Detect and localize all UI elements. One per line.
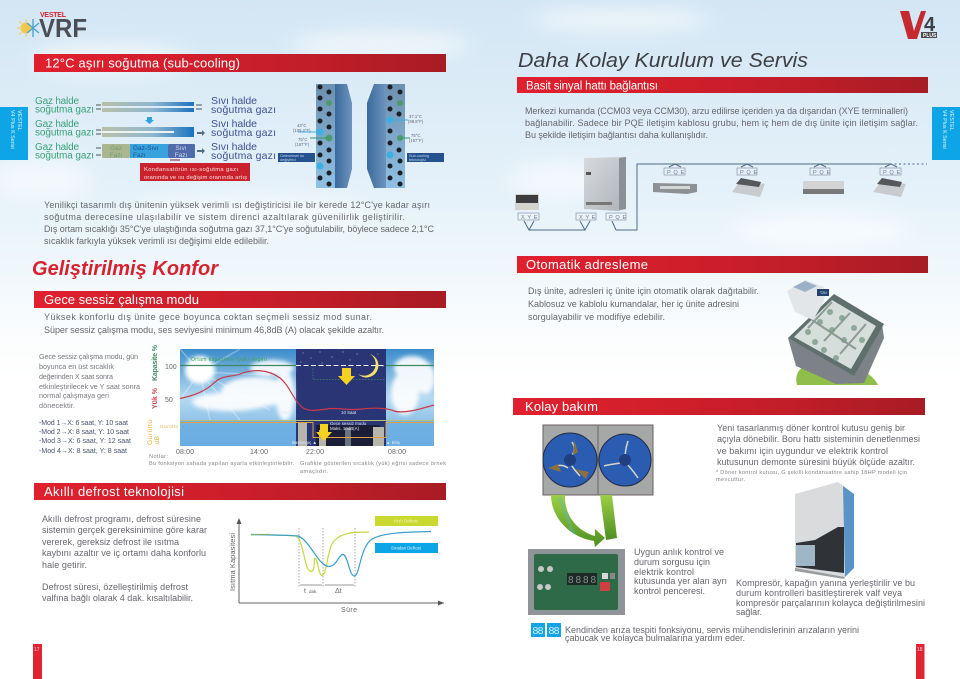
heading band: Otomatik adresleme: Otomatik adresleme [526,257,648,272]
text: signal description: bağlanabilir. Sadece bir PQE iletişim kablosu grubu, hem iç hem de dış ünite için iletişim sağlar. [525,118,918,128]
chart small labels: 10 Saat [341,410,357,415]
time arrows [300,584,354,586]
text: self diagnosis: Kendinden arıza tespiti fonksiyonu, servis mühendislerinin arızaların yerini [565,625,859,635]
logo: Vestel VRF [17,12,87,43]
liquid labels [211,95,276,162]
controller [515,194,539,210]
heading: Daha Kolay Kurulum: Daha Kolay Kurulum ve Servis [518,49,808,72]
logo: V4 Plus: PLUS [923,33,937,39]
chart axes labels: 08:00 [388,449,406,456]
liquid labels: Sıvı halde [211,118,257,130]
text: mode list: -Mod 4→X: 8 saat, Y: 8 saat [39,448,127,455]
icon: error display [531,623,561,637]
chart axes labels: dB [154,436,161,444]
side tab right [932,107,960,160]
gas labels: Gaz halde [35,142,79,153]
text: sub-cooling description: Dış ortam sıcaklığı 35°C'ye ulaştığında soğutma gazı 37,1°C'ye soğutulabilir, böylece sadece 2,1°C [44,224,434,234]
capacity line [180,357,434,380]
label: sub-cooling: Sub-cooling [409,154,429,158]
heading band: Gece sessiz [34,291,446,308]
text: sub-cooling description: Yenilikçi tasarımlı dış ünitenin yüksek verimli ısı değiştiricisi ile bir kerede 12°C'ye kadar aşırı [44,200,430,210]
heading band: sub-cooling: 12°C aşırı soğutma (sub-cooling) [45,56,240,70]
text: compressor: kompresör parçalarının kolayca değiştirilmesini [736,598,925,608]
wiring lines [524,164,927,230]
tubes: Fazı [110,152,123,159]
chart small labels: ▲ Bitiş [386,440,401,445]
heading band: Gece sessiz: Gece sessiz çalışma modu [44,292,199,307]
liquid labels: soğutma gazı [211,104,276,116]
chart small labels: Maks. 10dB(A) [330,426,360,431]
image: control board [528,549,625,615]
text: auto addressing: sorgulayabilir ve modifiye edebilir. [528,312,665,322]
text: night mode notes: Gece sessiz çalışma modu, gün [39,352,138,361]
arrows: yellow [316,368,355,441]
heading band: Akilli defrost: Akıllı defrost teknolojisi [44,484,184,499]
text: control box: ve bakımı için uygundur ve elektrik kontrol [717,446,888,456]
legend: Hızlı Defrost [394,518,419,524]
text: mode list: -Mod 3→X: 6 saat, Y: 12 saat [39,438,131,445]
liquid labels: soğutma gazı [211,127,276,139]
heading band: Kolay bakim [513,398,925,415]
text: night mode description [44,312,384,335]
side tab right: V4 Plus K Serisi [941,110,947,149]
chart small labels: 8 Saat [278,410,291,415]
tubes [96,102,205,160]
chart notes: Notlar: [149,454,168,460]
green arrow: Servis düzlem açısı [557,497,577,535]
text: control window [634,547,727,596]
temperature labels: (167°F) [295,142,310,147]
gas labels: Gaz halde [35,96,79,107]
text: defrost description: Defrost süresi, özelleştirilmiş defrost [42,582,188,592]
text: night mode notes [39,352,140,410]
heading band: Basit sinyal: Basit sinyal hattı bağlantısı [526,80,658,92]
logo: V4 Plus [900,11,937,39]
axis labels: dak. [309,589,318,594]
tubes: Gaz [110,145,122,152]
legend [375,516,438,553]
text: self diagnosis [565,625,859,643]
text: defrost description: sistemin gerçek gereksinimine göre karar [42,525,207,535]
text: night mode notes: boyunca en üst sıcaklık [39,362,114,371]
text: compressor: Kompresör, kapağın yanına yerleştirilir ve bu [736,578,915,588]
liquid labels: soğutma gazı [211,150,276,162]
terminal text: X Y E [521,215,538,221]
text: defrost description: hale getirir. [42,560,87,570]
image: fan unit and green arrow [543,425,653,547]
text: defrost description: Akıllı defrost programı, defrost süresine [42,514,201,524]
page number 18 [916,644,924,679]
temperature labels: (109.4°F) [293,128,311,133]
heading band: sub-cooling [34,54,446,72]
tubes: Fazı [133,152,146,159]
temperature labels: 75°C [298,137,307,142]
page number 17: 17 [34,647,40,653]
side tab left: V4 Plus K Serisi [9,110,15,149]
text: night mode notes: dönecektir. [39,401,75,410]
exchanger right [367,84,410,188]
load curve [180,371,434,412]
text: night mode notes: normal çalışmaya geri [39,391,109,400]
chart small labels [278,410,401,445]
terminal text: X Y E [579,215,596,221]
heading band: Akilli defrost [34,483,446,500]
chart notes [149,454,446,475]
diagram: wiring [515,157,927,230]
chart axes labels: 50 [165,397,173,404]
temperature labels: (98.8°F) [408,119,424,124]
text: control box: açıyla dönebilir. Boru hattı sisteminin denetlenmesi [717,434,920,444]
text: control window: Uygun anlık kontrol ve [634,547,724,557]
heading band: Kolay bakim: Kolay bakım [525,399,598,414]
tubes: Fazı [175,152,188,159]
exchanger left [298,84,352,188]
text: self diagnosis: çabucak ve kolayca bulmalarına yardım eder. [565,633,745,643]
temperature labels: 75°C [411,133,420,138]
tubes: Gaz-Sıvı [133,145,158,152]
text: control window: elektrik kontrol [634,567,694,577]
outdoor unit [584,157,626,211]
gas labels [35,96,94,162]
text: signal description: Merkezi kumanda (CCM03 veya CCM30), arzu edilirse içeriden ya da dışarıdan (XYE terminalleri) [525,106,908,116]
stars [300,352,384,366]
text: control box: * Döner kontrol kutusu, G şekilli kondansatöre sahip 18HP modeli için [716,470,907,476]
page number 17 [33,644,42,679]
chart small labels: Gece sessiz modu [330,421,367,426]
label: geleneksel: değiştirici [280,158,296,162]
heading band: Otomatik adresleme [517,256,928,273]
text: defrost description: valfına bağlı olarak 4 dak. kısaltılabilir. [42,593,193,603]
chart notes: amaçlıdır. [300,469,328,475]
chart axes labels: 14:00 [250,449,268,456]
logo: Vestel VRF: VESTEL [40,12,67,19]
text: defrost description: vererek, gereksiz defrost ile ısıtma [42,537,179,547]
icon: error display: 88 [532,625,544,637]
chart notes: Grafikte gösterilen sıcaklık (yük) eğrisi sadece örnek [300,461,446,467]
text: sub-cooling description [44,200,434,246]
chart axes labels: 08:00 [176,449,194,456]
chart notes: Bu fonksiyon sahada yapılan ayarla etkinleştirilebilir. [149,461,294,467]
text: compressor: sağlar. [736,607,762,617]
guides [299,528,355,588]
chart axes labels: Gürültü [147,420,154,445]
curve: normal defrost [251,532,431,576]
text: night mode notes: değerinden X saat sonra [39,372,113,381]
logo: Vestel VRF: VRF [39,13,87,43]
temperature labels: (167°F) [409,138,424,143]
text: auto addressing [528,286,759,322]
noise lines [180,420,434,438]
text: compressor [736,578,925,617]
text: night mode notes: etkinleştirilecek ve Y saat sonra [39,382,140,391]
terminal text: P Q E [883,170,901,176]
terminal text: P Q E [667,170,685,176]
moon [358,354,378,377]
text: defrost description: kaybını azaltır ve iç ortamı daha konforlu [42,548,206,558]
text: control box: mevcuttur. [716,477,745,483]
text: mode list [39,420,131,455]
gas labels: soğutma gazı [35,128,94,138]
chart small labels: Başlangıç ▲ [292,440,317,445]
terminal text [521,170,901,221]
fan unit [543,425,653,495]
text: sub-cooling description: soğutma derecesine ulaşılabilir ve sistem direnci azaltılarak güvenilirlik geliştirilir. [44,212,405,222]
text: night mode description: Süper sessiz çalışma modu, ses seviyesini minimum 46,8dB (A) olacak şekilde azaltır. [44,325,384,335]
axis labels: t [304,588,306,595]
label: sub-cooling [407,153,444,162]
chart axes labels: Yük % [152,387,159,409]
heading band: Basit sinyal [517,77,928,93]
text: control box: kutusunun demonte süresini büyük ölçüde azaltır. [717,457,915,467]
side tab right: VESTEL [948,110,954,131]
logo: V4 Plus: 4 [924,14,936,36]
image: compressor unit [795,482,854,579]
image: control board: 8888 [568,575,596,586]
chart axes labels: Gürültü [160,424,178,429]
terminal text: P Q E [813,170,831,176]
text: control box: Yeni tasarlanmış döner kontrol kutusu geniş bir [717,423,905,433]
callout: condenser [140,163,250,181]
buildings [298,423,384,446]
text: compressor: durum kontrolleri basitleştirerek valf veya [736,588,902,598]
text: sub-cooling description: sıcaklık farkıyla yüksek verimli ısı değişimi elde edilebilir. [44,236,269,246]
legend: Sıradan Defrost [391,546,422,550]
side tab left [0,107,28,160]
axis labels: Δt [335,588,342,595]
label: geleneksel: Geleneksel ısı [280,154,304,158]
chart axes labels [147,344,406,456]
start segment [251,534,270,536]
text: defrost description [42,514,207,603]
diagram: heat exchangers [278,84,444,188]
temperature labels: 37.1°C [409,114,422,119]
callout: condenser: oranında ve ısı değişim oranında artış [144,175,247,181]
text: signal description [525,106,918,140]
temperature labels: 43°C [297,123,306,128]
axis labels [228,533,357,614]
chart: defrost curves [228,516,444,614]
text: control box [716,423,920,483]
curve: fast defrost [251,532,369,576]
terminal boxes [518,168,901,220]
heading: Gelistirilmis Konfor: Geliştirilmiş Konfor [32,258,219,280]
terminal text: P Q E [609,215,627,221]
text: mode list: -Mod 2→X: 8 saat, Y: 10 saat [39,429,129,436]
axis labels: Süre [341,607,357,614]
chart axes labels: 22:00 [306,449,324,456]
temperature labels [293,114,424,147]
terminal text: P Q E [740,170,758,176]
liquid labels: Sıvı halde [211,95,257,107]
tubes: Sıvı [175,145,187,152]
diagram: condensation phases [35,95,276,181]
indoor units [653,178,906,197]
label: geleneksel [278,153,315,162]
label: sub-cooling: teknolojisi [409,158,426,162]
text: mode list: -Mod 1→X: 6 saat, Y: 10 saat [39,420,128,427]
axes [239,522,444,603]
gas labels: soğutma gazı [35,104,94,116]
text: signal description: Bu şekilde iletişim bağlantısı daha kullanışlıdır. [525,130,708,140]
text: night mode description: Yüksek konforlu dış ünite gece boyunca coktan seçmeli sessiz mod sunar. [44,312,372,322]
liquid labels: Sıvı halde [211,141,257,153]
chart: night mode capacity [147,344,446,475]
axis labels: Isıtma Kapasitesi [228,533,237,591]
text: auto addressing: Dış ünite, adresleri iç ünite için otomatik olarak dağıtabilir. [528,286,759,296]
chart axes labels: 100 [165,364,177,371]
gas labels: soğutma gazı [35,150,94,162]
chart background [180,349,435,446]
callout: condenser: Kondansatörün ısı-soğutma gazı [144,167,238,173]
capacity line: Ortam kapasitesi (yük) değeri [191,357,267,363]
chart axes labels: Kapasite % [152,344,159,381]
image: rooftop units: T2N [820,291,827,295]
icon: error display: 88 [548,625,560,637]
side tab left: VESTEL [16,110,22,131]
gas labels: Gaz halde [35,119,79,130]
text: control window: durum sorgusu için [634,557,710,567]
image: rooftop units [787,280,884,385]
text: control window: kutusunda yer alan ayrı [634,576,727,586]
text: control window: kontrol penceresi. [634,586,705,596]
text: auto addressing: Kablosuz ve kablolu kumandalar, her iç ünite adresini [528,299,739,309]
page number 18: 18 [917,647,923,653]
